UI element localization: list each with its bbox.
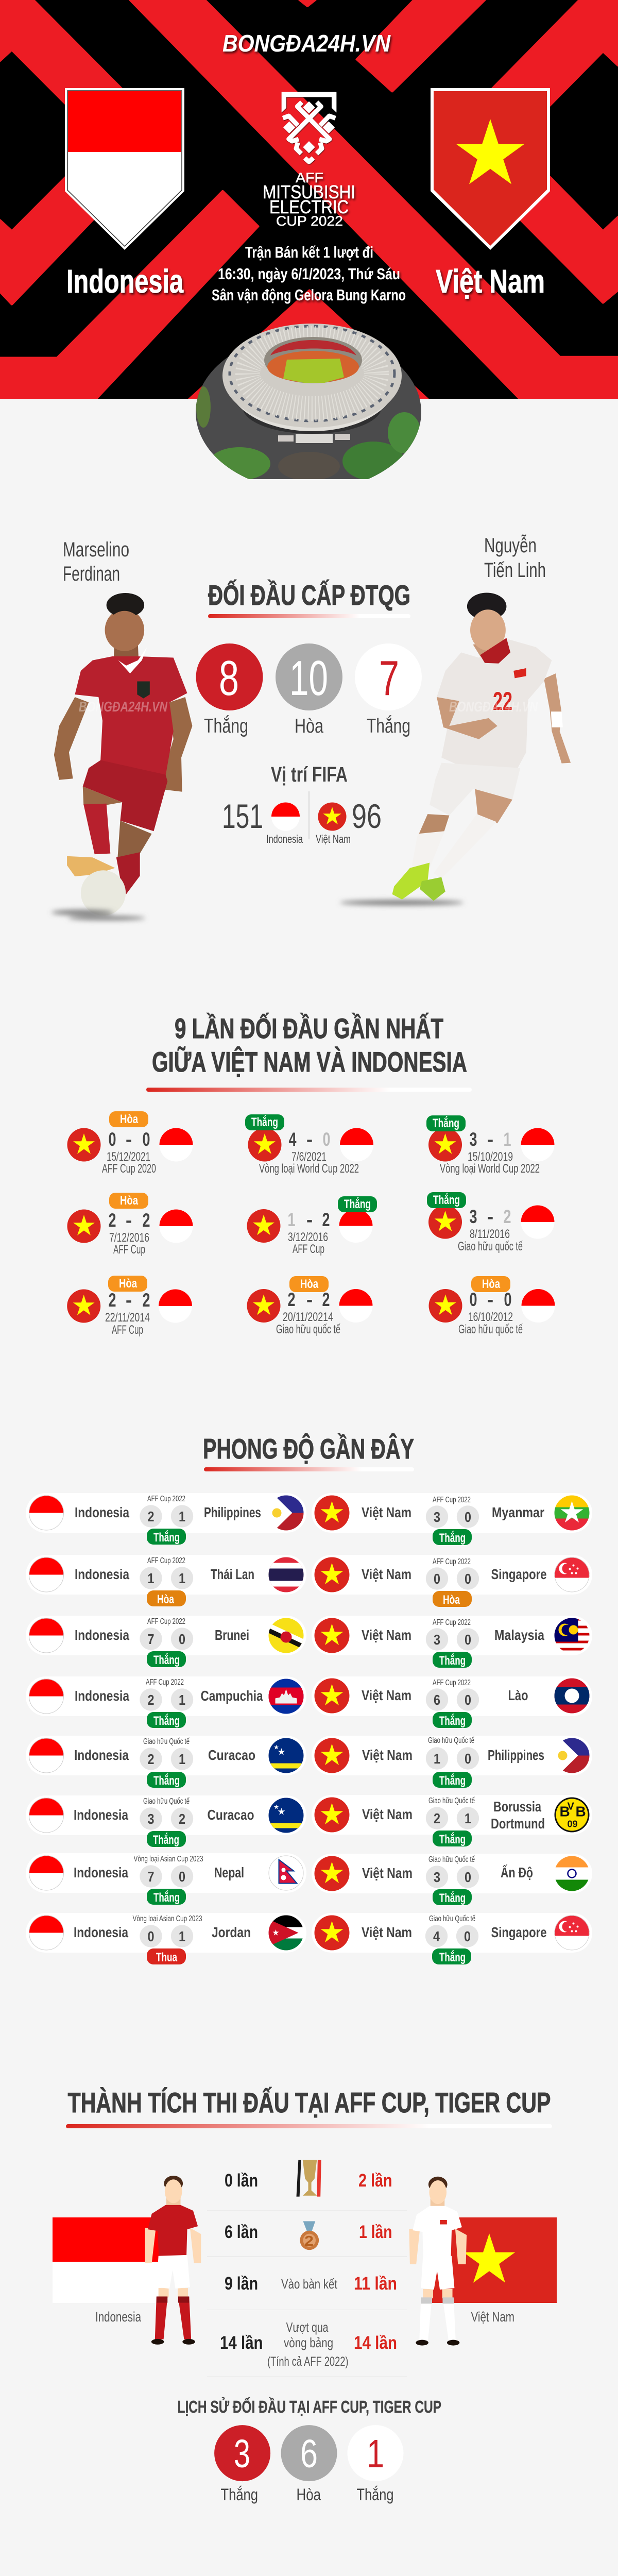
match information: Trận Bán kết 1 lượt đi [245, 243, 373, 261]
match card 6: - [487, 1206, 493, 1227]
form row 1: 2 [147, 1509, 154, 1524]
form row 5: Việt Nam [362, 1747, 413, 1763]
heading underline [66, 2124, 552, 2128]
match card 2: - [306, 1129, 313, 1150]
match card 1: AFF Cup 2020 [102, 1162, 156, 1176]
stat: draws: Hòa [297, 2485, 321, 2504]
AFF cup wordmark: AFF [296, 170, 323, 185]
match card 8: Hòa [300, 1277, 319, 1291]
form row 8: 0 [147, 1928, 154, 1944]
match card 2: Thắng [251, 1115, 278, 1129]
form row 5: 1 [179, 1751, 185, 1767]
match card 2 [245, 1114, 373, 1176]
FIFA ranking: 151 [222, 797, 263, 835]
form row 1: Thắng [153, 1530, 180, 1545]
form row 5: Giao hữu Quốc tế [428, 1736, 474, 1745]
match card 8 [247, 1276, 373, 1336]
FIFA ranking: Việt Nam [316, 833, 351, 845]
label: Indonesia: Indonesia [95, 2309, 142, 2325]
form row 2: AFF Cup 2022 [147, 1556, 185, 1565]
stat: Indonesia wins: 8 [219, 651, 239, 706]
form row 4: AFF Cup 2022 [433, 1679, 471, 1687]
match card 3: - [487, 1129, 493, 1150]
row: past group stage: (Tính cả AFF 2022) [267, 2354, 348, 2369]
form row 2: Indonesia [75, 1566, 129, 1582]
form row 5: Philippines [488, 1747, 544, 1763]
form row 7: 0 [465, 1869, 471, 1885]
form row 1: 1 [179, 1509, 185, 1524]
form row 2: AFF Cup 2022 [433, 1557, 471, 1566]
form row 3: Brunei [215, 1627, 249, 1643]
match information: Sân vận động Gelora Bung Karno [212, 286, 406, 304]
form row 3 [26, 1616, 592, 1668]
FIFA ranking: Vị trí FIFA [271, 762, 348, 786]
stat: Indonesia wins: Thắng [220, 2485, 258, 2504]
row: runners-up: 1 lần [359, 2222, 392, 2242]
header background pattern [0, 0, 618, 403]
form row 6: B [559, 1803, 570, 1820]
match card 5: - [306, 1209, 313, 1230]
match card 5: AFF Cup [293, 1242, 324, 1256]
match card 5: 2 [322, 1209, 330, 1230]
match card 1: 15/12/2021 [107, 1150, 150, 1164]
form row 7: Thắng [153, 1890, 180, 1905]
form row 8: Thắng [439, 1950, 466, 1964]
flag: Vietnam banner [432, 2217, 557, 2303]
form row 2: 0 [465, 1571, 471, 1587]
form row 4: Thắng [153, 1714, 180, 1728]
form row 5: Curacao [208, 1747, 255, 1763]
form row 7: 0 [179, 1869, 185, 1885]
team name: Vietnam: Việt Nam [436, 263, 545, 300]
form row 5: Thắng [153, 1773, 180, 1788]
form row 1: Philippines [204, 1504, 261, 1520]
form row 8: Indonesia [74, 1924, 128, 1940]
logo: Bongda24h.vn: BONGĐA24H.VN [222, 30, 391, 57]
panel: AFF Cup and Tiger Cup record [53, 2087, 557, 2504]
form row 8: Giao hữu Quốc tế [429, 1914, 475, 1923]
match card 5: 3/12/2016 [288, 1230, 328, 1244]
form row 2: Hòa [157, 1592, 174, 1606]
match card 5 [247, 1196, 377, 1256]
form row 5: Giao hữu Quốc tế [143, 1737, 190, 1746]
row: past group stage: Vượt qua [286, 2319, 329, 2335]
match card 7: AFF Cup [112, 1323, 143, 1337]
AFF cup wordmark [263, 170, 355, 229]
form row 6: 09 [568, 1819, 578, 1829]
row: semi-finals: Vào bàn kết [281, 2276, 338, 2292]
form row 6 [26, 1795, 592, 1847]
match card 6: 3 [470, 1206, 477, 1227]
match card 4: - [126, 1210, 132, 1231]
stat: draws: Hòa [295, 715, 323, 737]
form row 4 [26, 1676, 592, 1728]
team name: Indonesia: Indonesia [66, 263, 183, 300]
player name: Marselino Ferdinan: Marselino [63, 538, 129, 561]
heading: recent form: PHONG ĐỘ GẦN ĐÂY [203, 1433, 414, 1465]
jersey number on player: 22 [493, 687, 512, 716]
match card 4: 2 [142, 1210, 150, 1231]
match card 3: 1 [504, 1129, 511, 1150]
form row 4: 0 [465, 1692, 471, 1708]
FIFA ranking: Indonesia [266, 833, 303, 845]
flag shield: Indonesia [65, 88, 184, 250]
form row 6: Thắng [439, 1832, 466, 1846]
form row 7: Giao hữu Quốc tế [428, 1855, 475, 1864]
match card 4 [67, 1193, 193, 1257]
player name: Marselino Ferdinan [63, 538, 129, 585]
match card 9: 0 [504, 1289, 512, 1310]
player name: Marselino Ferdinan: Ferdinan [63, 563, 120, 585]
form row 2: Thái Lan [211, 1566, 254, 1582]
player photo: Nguyen Tien Linh [392, 593, 571, 901]
form row 4: 1 [179, 1692, 185, 1708]
row: past group stage: 14 lần [220, 2333, 263, 2353]
watermark on right player: BONGĐA24H.VN [449, 699, 538, 715]
form row 1: Myanmar [492, 1504, 544, 1520]
match card 3: 15/10/2019 [468, 1150, 513, 1164]
form row 5: Indonesia [74, 1747, 129, 1763]
form row 3: Thắng [153, 1653, 180, 1667]
form row 8: 0 [464, 1928, 471, 1944]
flag shield: Vietnam [431, 88, 550, 250]
form row 7: Thắng [439, 1891, 466, 1905]
row: semi-finals: 11 lần [354, 2274, 397, 2294]
form row 8: Jordan [212, 1924, 251, 1940]
match card 1: 0 [108, 1129, 116, 1150]
form row 3: Malaysia [494, 1627, 544, 1643]
match card 1 [67, 1111, 193, 1176]
player name: Nguyen Tien Linh: Tiến Linh [484, 559, 546, 582]
row: champions: 2 lần [358, 2171, 392, 2191]
stat: draws [276, 643, 342, 737]
stat: Vietnam wins: Thắng [367, 715, 410, 737]
form row 6: Dortmund [491, 1816, 545, 1832]
match card 3: 3 [470, 1129, 477, 1150]
match card 5: 1 [287, 1209, 296, 1230]
form row 8: Vòng loại Asian Cup 2023 [133, 1914, 202, 1923]
subheading: head-to-head in tournament: LỊCH SỬ ĐỐI ĐẦU TẠI AFF CUP, TIGER CUP [177, 2397, 441, 2416]
form row 6: Borussia [493, 1799, 541, 1815]
heading underline [146, 1088, 472, 1092]
FIFA ranking: 96 [352, 797, 382, 835]
form row 5: 2 [147, 1751, 154, 1767]
match card 9: Hòa [482, 1277, 501, 1291]
form row 6: Giao hữu Quốc tế [143, 1797, 190, 1806]
match card 3 [426, 1115, 555, 1176]
panel: header [0, 0, 618, 479]
form row 1: Thắng [439, 1531, 466, 1545]
stadium photo [191, 324, 427, 484]
form row 5: 0 [465, 1751, 471, 1767]
figure: Vietnamese player [409, 2177, 467, 2346]
match card 6: Giao hữu quốc tế [458, 1240, 523, 1253]
form row 1: Việt Nam [362, 1504, 411, 1520]
panel: coach profiles [0, 2550, 618, 2576]
row: past group stage: 14 lần [354, 2333, 397, 2353]
form row 7: Ấn Độ [501, 1865, 533, 1880]
form row 7: Indonesia [74, 1865, 128, 1880]
match card 4: 7/12/2016 [109, 1231, 149, 1245]
form row 1: 0 [465, 1509, 471, 1525]
form row 1: AFF Cup 2022 [147, 1495, 185, 1503]
match information: 16:30, ngày 6/1/2023, Thứ Sáu [218, 265, 400, 283]
heading: last nine meetings [152, 1012, 467, 1078]
form row 4: AFF Cup 2022 [146, 1678, 184, 1687]
heading: last nine meetings: 9 LẦN ĐỐI ĐẦU GẦN NHẤT [175, 1012, 443, 1044]
form row 5: Thắng [439, 1773, 466, 1788]
form row 2: Singapore [491, 1566, 547, 1582]
form row 1: AFF Cup 2022 [433, 1496, 471, 1504]
form row 3: AFF Cup 2022 [433, 1618, 471, 1627]
match card 6 [427, 1192, 555, 1253]
form row 8 [26, 1913, 592, 1964]
row: semi-finals: 9 lần [225, 2274, 258, 2294]
match card 6: 2 [504, 1206, 511, 1227]
form row 3: 7 [147, 1631, 154, 1647]
form row 1: Indonesia [75, 1504, 129, 1520]
form row 4: 6 [434, 1692, 440, 1708]
shadows under players [52, 900, 464, 920]
form row 3: 3 [434, 1632, 440, 1648]
match card 4: 2 [108, 1210, 116, 1231]
stat: Indonesia wins: 3 [234, 2432, 250, 2476]
form row 6: V [568, 1801, 575, 1812]
form row 6: Thắng [153, 1833, 179, 1847]
form row 6: 3 [147, 1811, 154, 1827]
match card 9: 0 [470, 1289, 477, 1310]
form row 8: Thua [156, 1951, 177, 1964]
stat: Vietnam wins: 1 [367, 2432, 384, 2476]
match card 8: - [306, 1289, 313, 1310]
form row 7: Vòng loại Asian Cup 2023 [134, 1855, 203, 1863]
match card 9: Giao hữu quốc tế [458, 1323, 523, 1336]
AFF cup wordmark: MITSUBISHI [263, 181, 355, 202]
watermark on left player: BONGĐA24H.VN [79, 699, 168, 715]
stat: Vietnam wins [347, 2425, 404, 2504]
player photo: Marselino Ferdinan [54, 593, 192, 916]
match card 7 [67, 1276, 192, 1337]
form row 2: 1 [147, 1570, 154, 1586]
match card 9: 16/10/2012 [468, 1310, 513, 1324]
match card 2: 7/6/2021 [291, 1150, 327, 1164]
heading: last nine meetings: GIỮA VIỆT NAM VÀ INDONESIA [152, 1046, 467, 1078]
form row 1 [26, 1490, 592, 1545]
match card 7: 2 [108, 1290, 116, 1311]
match card 8: 2 [322, 1289, 330, 1310]
form row 3: Việt Nam [362, 1627, 411, 1643]
match card 1: Hòa [120, 1112, 139, 1126]
form row 4: Thắng [439, 1714, 466, 1728]
form row 4: Indonesia [75, 1688, 129, 1704]
form row 7: Việt Nam [362, 1865, 413, 1881]
form row 8: Singapore [491, 1924, 547, 1940]
match card 2: 0 [322, 1129, 331, 1150]
form row 6: 2 [434, 1810, 440, 1826]
form row 6: Curacao [207, 1807, 254, 1823]
form row 6: B [576, 1803, 586, 1820]
AFF cup wordmark: ELECTRIC [269, 196, 349, 217]
stat: draws: 10 [289, 651, 328, 706]
form row 6: 2 [179, 1811, 185, 1827]
heading: head to head: ĐỐI ĐẦU CẤP ĐTQG [208, 579, 410, 611]
match card 8: 2 [287, 1289, 296, 1310]
match information [212, 243, 406, 304]
form row 3: 0 [465, 1632, 471, 1648]
form row 5 [26, 1732, 592, 1788]
row: champions: 0 lần [225, 2171, 258, 2191]
form row 6: Việt Nam [362, 1806, 413, 1822]
match card 6: Thắng [433, 1193, 460, 1207]
figure: Indonesian player [145, 2176, 201, 2345]
FIFA ranking [222, 762, 382, 845]
row: runners-up [225, 2221, 392, 2250]
form row 3: AFF Cup 2022 [147, 1617, 185, 1626]
row: champions [225, 2160, 392, 2197]
label: Vietnam: Việt Nam [471, 2309, 514, 2325]
form row 2 [26, 1555, 592, 1607]
panel: recent form [26, 1433, 592, 1964]
form row 7 [26, 1853, 592, 1905]
form row 4: Việt Nam [362, 1687, 411, 1703]
form row 8: 1 [179, 1928, 185, 1944]
row: runners-up: 6 lần [225, 2222, 258, 2242]
player name: Nguyen Tien Linh: Nguyễn [484, 534, 537, 557]
match card 2: Vòng loại World Cup 2022 [259, 1162, 359, 1176]
match card 2: 4 [288, 1129, 297, 1150]
match card 4: AFF Cup [113, 1243, 145, 1257]
form row 8: Việt Nam [362, 1924, 412, 1940]
form row 2: 0 [434, 1571, 440, 1587]
form row 2: Hòa [443, 1593, 460, 1607]
match card 3: Vòng loại World Cup 2022 [440, 1162, 540, 1176]
match card 6: 8/11/2016 [470, 1227, 510, 1241]
row: past group stage [220, 2319, 397, 2369]
heading underline [208, 614, 410, 618]
AFF cup logo [282, 92, 336, 162]
form row 7: Nepal [214, 1865, 244, 1880]
form row 2: 1 [179, 1570, 185, 1586]
match card 9: - [487, 1289, 493, 1310]
stat: draws [281, 2425, 337, 2504]
match card 4: Hòa [120, 1194, 139, 1208]
form row 4: Lào [508, 1687, 528, 1703]
row: semi-finals [225, 2274, 397, 2294]
match card 5: Thắng [344, 1197, 371, 1211]
form row 2: Việt Nam [362, 1566, 411, 1582]
match card 3: Thắng [433, 1116, 459, 1130]
form row 5: 1 [434, 1751, 440, 1767]
panel: last nine meetings [67, 1012, 555, 1337]
stat: draws: 6 [300, 2432, 318, 2476]
form row 8: 4 [433, 1928, 440, 1944]
form row 6: Giao hữu Quốc tế [428, 1797, 475, 1805]
form row 3: Thắng [439, 1653, 466, 1668]
match card 9 [428, 1276, 555, 1336]
match card 7: - [126, 1290, 132, 1311]
match card 1: 0 [142, 1129, 150, 1150]
form row 4: Campuchia [201, 1688, 263, 1704]
row: runners-up: 2 [304, 2233, 314, 2249]
form row 1: 3 [434, 1509, 440, 1525]
stat: Indonesia wins [214, 2425, 270, 2504]
form row 6: Indonesia [74, 1807, 128, 1823]
flag: Indonesia banner [53, 2217, 161, 2303]
form row 4: 2 [147, 1692, 154, 1708]
match card 8: 20/11/20214 [283, 1310, 333, 1324]
stat: Vietnam wins [355, 643, 422, 737]
stat: Vietnam wins: Thắng [356, 2485, 393, 2504]
form row 7: 7 [147, 1869, 154, 1885]
match card 7: Hòa [119, 1277, 138, 1291]
form row 7: 3 [434, 1869, 440, 1885]
panel: head-to-head national teams [50, 534, 571, 924]
match card 7: 2 [142, 1290, 150, 1311]
AFF cup wordmark: CUP 2022 [276, 213, 343, 229]
stat: Vietnam wins: 7 [379, 651, 399, 706]
stat: Indonesia wins [196, 643, 263, 737]
form row 3: Indonesia [75, 1627, 129, 1643]
match card 7: 22/11/2014 [105, 1311, 150, 1325]
player name: Nguyen Tien Linh [484, 534, 546, 582]
row: past group stage: vòng bảng [284, 2335, 333, 2350]
form row 3: 0 [179, 1631, 185, 1647]
heading underline [204, 1467, 414, 1471]
match card 8: Giao hữu quốc tế [276, 1323, 340, 1336]
match card 1: - [126, 1129, 132, 1150]
stat: Indonesia wins: Thắng [204, 715, 248, 737]
form row 6: 1 [465, 1810, 471, 1826]
